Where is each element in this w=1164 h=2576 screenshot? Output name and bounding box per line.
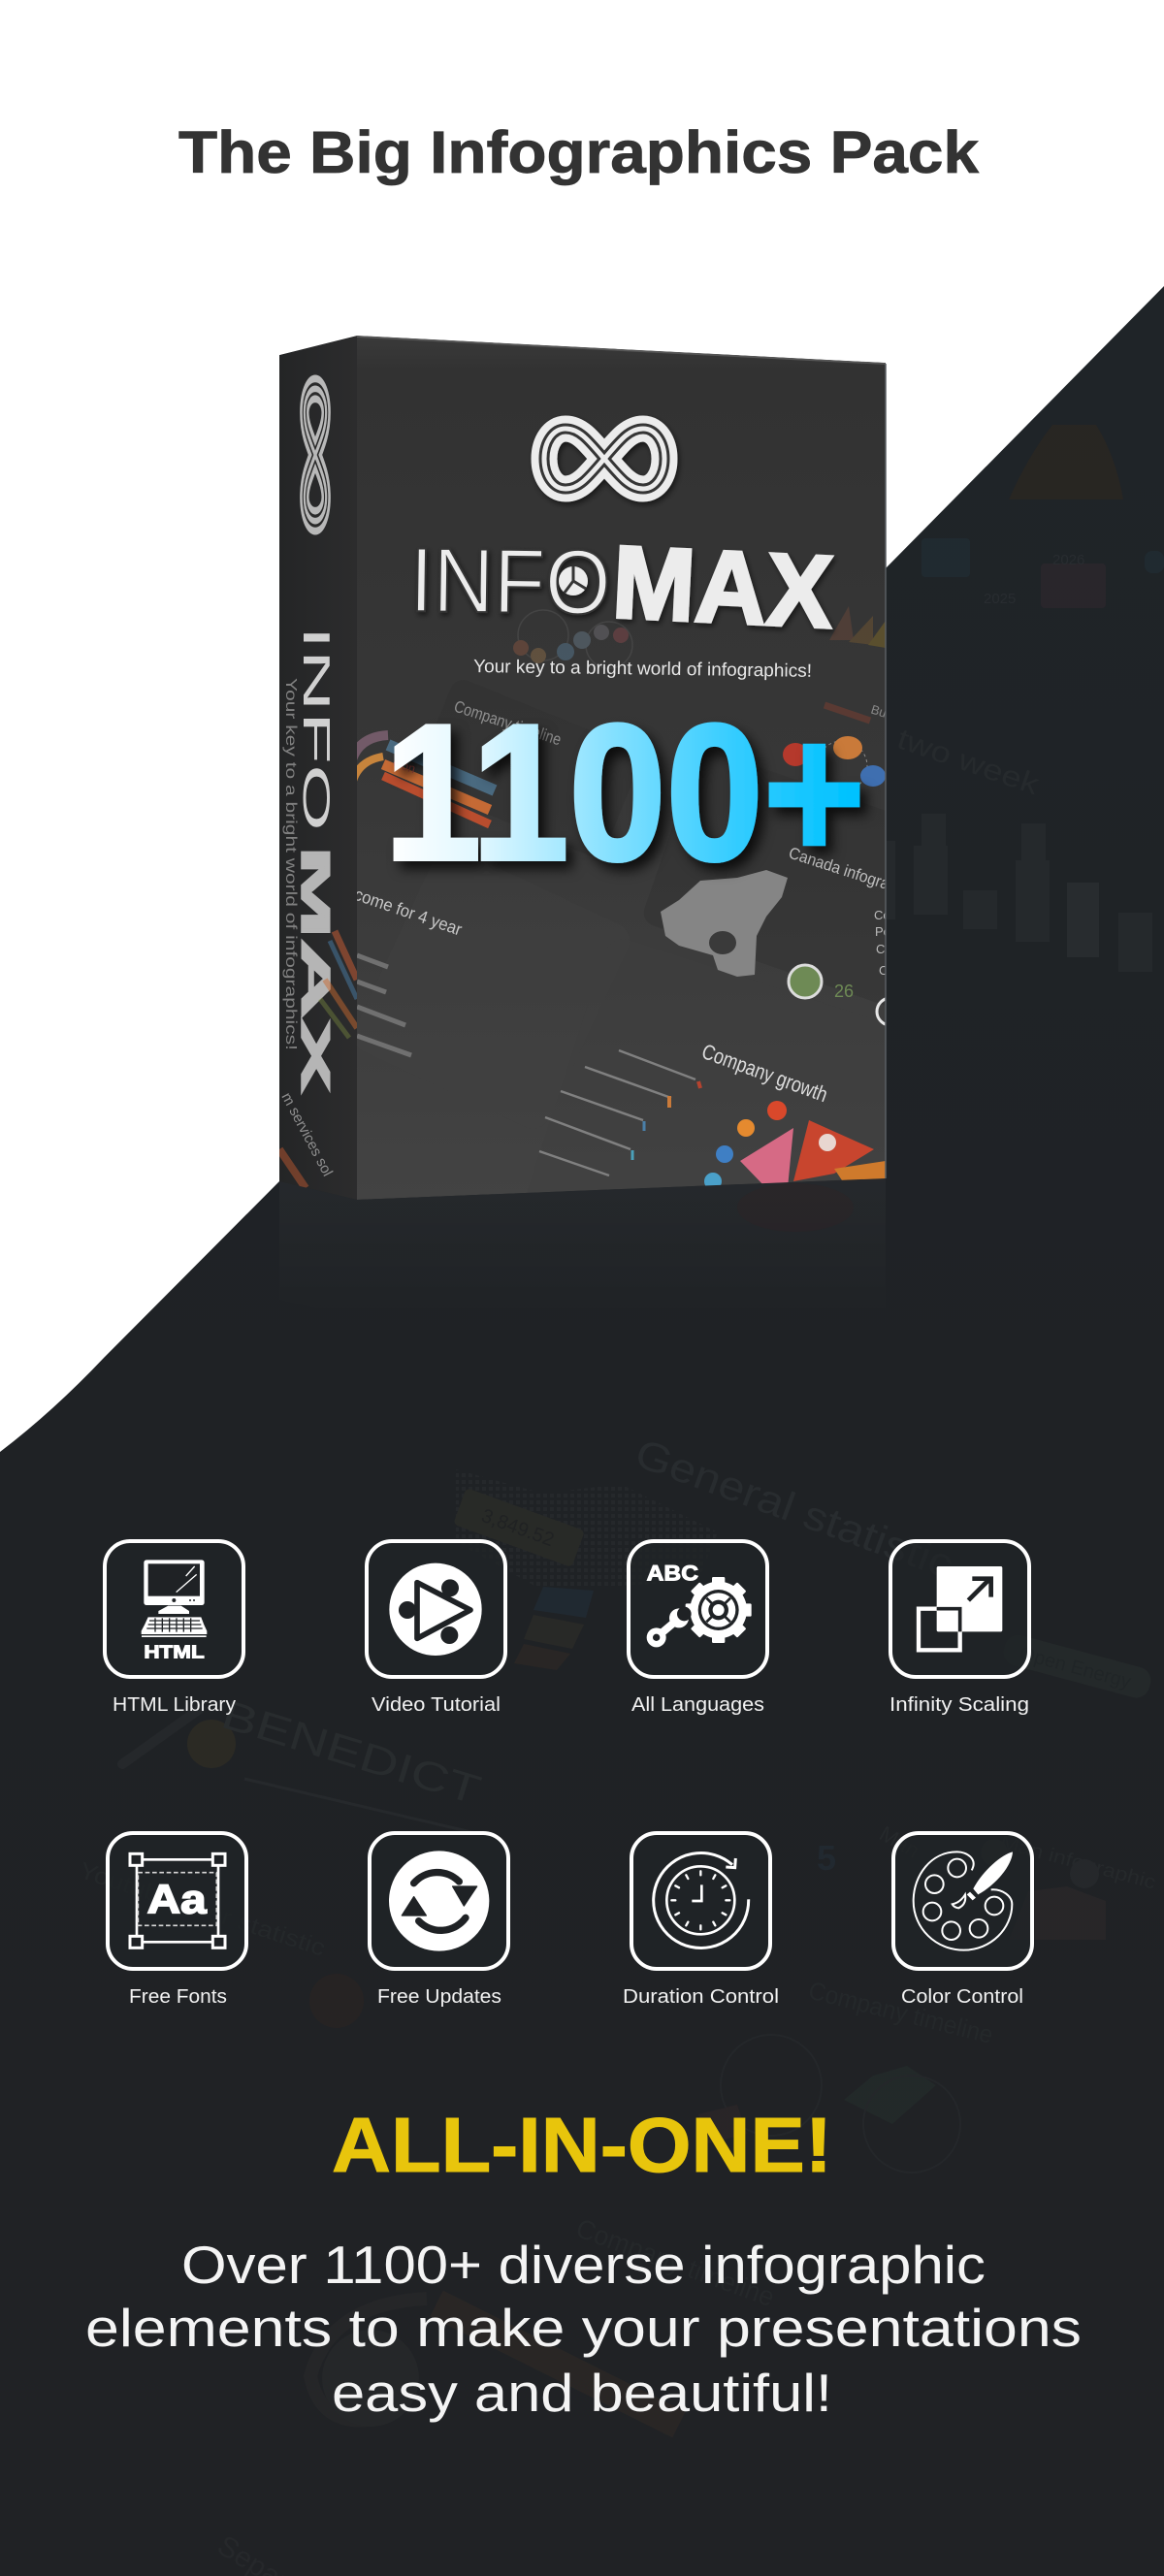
ghost: value tag: 3,849.52 — [478, 1505, 557, 1551]
ghost: man infographic: Man — [875, 1821, 923, 1863]
icon: gear and wrench — [647, 1561, 752, 1647]
text rows — [539, 1050, 700, 1175]
description paragraph: elements to make your presentations — [85, 2298, 1082, 2358]
product box — [279, 336, 887, 1232]
description paragraph — [85, 2235, 1082, 2423]
icon frame — [629, 1541, 767, 1677]
company growth caption: Company growth — [698, 1039, 831, 1107]
label: Duration Control — [623, 1986, 779, 2008]
canada side labels: Co — [874, 908, 890, 922]
ghost: timeline shapes: 2025 — [984, 591, 1016, 607]
ghost: man infographic: Man infographic — [998, 1832, 1158, 1894]
company timeline caption: Company timeline — [452, 697, 564, 749]
canada map — [661, 870, 788, 977]
business caption: Bu — [869, 702, 889, 721]
icon frame — [367, 1541, 505, 1677]
feature: Video Tutorial — [367, 1541, 505, 1716]
icon: computer: HTML — [144, 1642, 205, 1662]
red accent bar — [824, 705, 870, 721]
wordmark pie mark — [559, 566, 588, 596]
all-in-one heading: ALL-IN-ONE! — [332, 2102, 832, 2188]
ghost: value tag — [453, 1488, 585, 1567]
pie chart segments — [740, 1120, 886, 1188]
description paragraph: easy and beautiful! — [332, 2363, 832, 2423]
icon: computer — [142, 1560, 207, 1662]
canada side labels: Po — [875, 924, 890, 939]
faded wheel segments — [513, 610, 632, 668]
ghost: youtube statistic caption: Youtube user statistic — [76, 1857, 329, 1962]
spine logo — [305, 389, 326, 521]
label: Infinity Scaling — [889, 1694, 1029, 1716]
ghost: man infographic — [817, 1821, 1158, 1940]
feature: Infinity Scaling — [889, 1541, 1029, 1716]
canada side labels: Ce — [876, 942, 892, 956]
canada side labels: C — [879, 963, 888, 978]
icon frame — [631, 1833, 770, 1969]
feature: Duration Control — [623, 1833, 779, 2008]
ghost: pill Open Energy: Open Energy — [1018, 1643, 1133, 1693]
icon: gear and wrench: ABC — [647, 1561, 698, 1585]
ghost: timeline shapes — [922, 538, 1164, 608]
canada caption: Canada infogra — [787, 844, 892, 893]
icon: refresh arrows — [389, 1851, 489, 1951]
pie chart dots — [704, 1101, 787, 1190]
resources badge: 26 — [834, 982, 854, 1001]
ribbon graphic — [349, 735, 495, 824]
label: Free Fonts — [129, 1986, 227, 2008]
front faded cards — [348, 676, 1003, 1355]
label: Color Control — [901, 1986, 1023, 2008]
ghost: red hexagon — [309, 1974, 364, 2028]
box logo — [544, 429, 664, 489]
ghost: timeline shapes: 2026 — [1052, 552, 1084, 568]
box spine — [277, 336, 357, 1200]
faded background infographics — [76, 425, 1164, 2576]
label: All Languages — [631, 1694, 764, 1716]
income bars — [357, 955, 411, 1055]
icon: text frame — [130, 1853, 225, 1948]
red faded label: Con — [391, 756, 417, 776]
ghost: funnel — [514, 1587, 594, 1670]
ghost: bar chart — [886, 814, 1152, 972]
ghost: circle diagram — [698, 2035, 960, 2173]
feature: Free Fonts — [108, 1833, 246, 2008]
canada side labels — [875, 911, 885, 975]
spine tagline: Your key to a bright world of infographics! — [282, 678, 299, 1050]
1100+ count: 1100+ — [384, 685, 865, 901]
spine colour stripes — [320, 931, 357, 1038]
spine wordmark: MAX — [293, 846, 339, 1093]
feature: Free Updates — [370, 1833, 508, 2008]
feature: HTML Library — [105, 1541, 243, 1716]
faded triangles — [829, 606, 886, 648]
box wordmark: INFO — [409, 529, 611, 633]
description paragraph: Over 1100+ diverse infographic — [181, 2235, 986, 2295]
icon frame — [893, 1833, 1032, 1969]
ghost: dotted world map — [456, 1469, 718, 1591]
spine wordmark: INFO — [295, 626, 337, 831]
icon frame — [370, 1833, 508, 1969]
ghost: BENEDICT: BENEDICT — [216, 1691, 486, 1813]
box reflection — [279, 1178, 886, 1319]
icon: scaling squares — [919, 1566, 1002, 1650]
ghost: lower ribbon — [310, 2213, 779, 2427]
ghost: pill Open Energy — [1000, 1632, 1153, 1701]
icon frame — [108, 1833, 246, 1969]
icon frame — [890, 1541, 1029, 1677]
spine wordmark — [301, 633, 331, 1096]
resources badge — [789, 965, 854, 1001]
feature: All Languages — [629, 1541, 767, 1716]
icon: text frame: Aa — [147, 1877, 207, 1922]
next badge — [875, 997, 885, 1026]
icon: clock with arrow — [654, 1852, 749, 1948]
box front — [357, 336, 886, 1200]
card caption: income: come for 4 year — [352, 885, 465, 940]
spine corner accent — [279, 1149, 306, 1188]
box wordmark: MAX — [610, 525, 835, 650]
ghost: general statistic heading: General statistic — [630, 1430, 959, 1587]
icon frame — [105, 1541, 243, 1677]
spine footer caption: m services sol — [277, 1090, 336, 1179]
reflection: coloured pie glow — [737, 1183, 854, 1232]
feature: Color Control — [893, 1833, 1032, 2008]
ghost: BENEDICT — [122, 1691, 486, 1833]
canada bay — [709, 931, 736, 954]
label: Free Updates — [377, 1986, 501, 2008]
ghost: two week heading: two week — [893, 723, 1044, 801]
ghost: man infographic: 5 — [817, 1838, 836, 1878]
icon: play button — [389, 1563, 482, 1656]
box wordmark — [409, 525, 835, 650]
title: The Big Infographics Pack — [178, 119, 979, 185]
box tagline: Your key to a bright world of infographics! — [473, 657, 812, 682]
box right edge — [885, 364, 887, 1178]
icon: palette and brush — [914, 1852, 1013, 1950]
label: HTML Library — [113, 1694, 236, 1716]
label: Video Tutorial — [372, 1694, 501, 1716]
orbit balls — [783, 736, 886, 791]
front top highlight — [357, 337, 886, 364]
ghost: orange shield — [1009, 425, 1123, 499]
ghost: company timeline caption: Company timeline — [806, 1976, 996, 2049]
ghost: lower ribbon: Company timeline — [572, 2213, 779, 2312]
